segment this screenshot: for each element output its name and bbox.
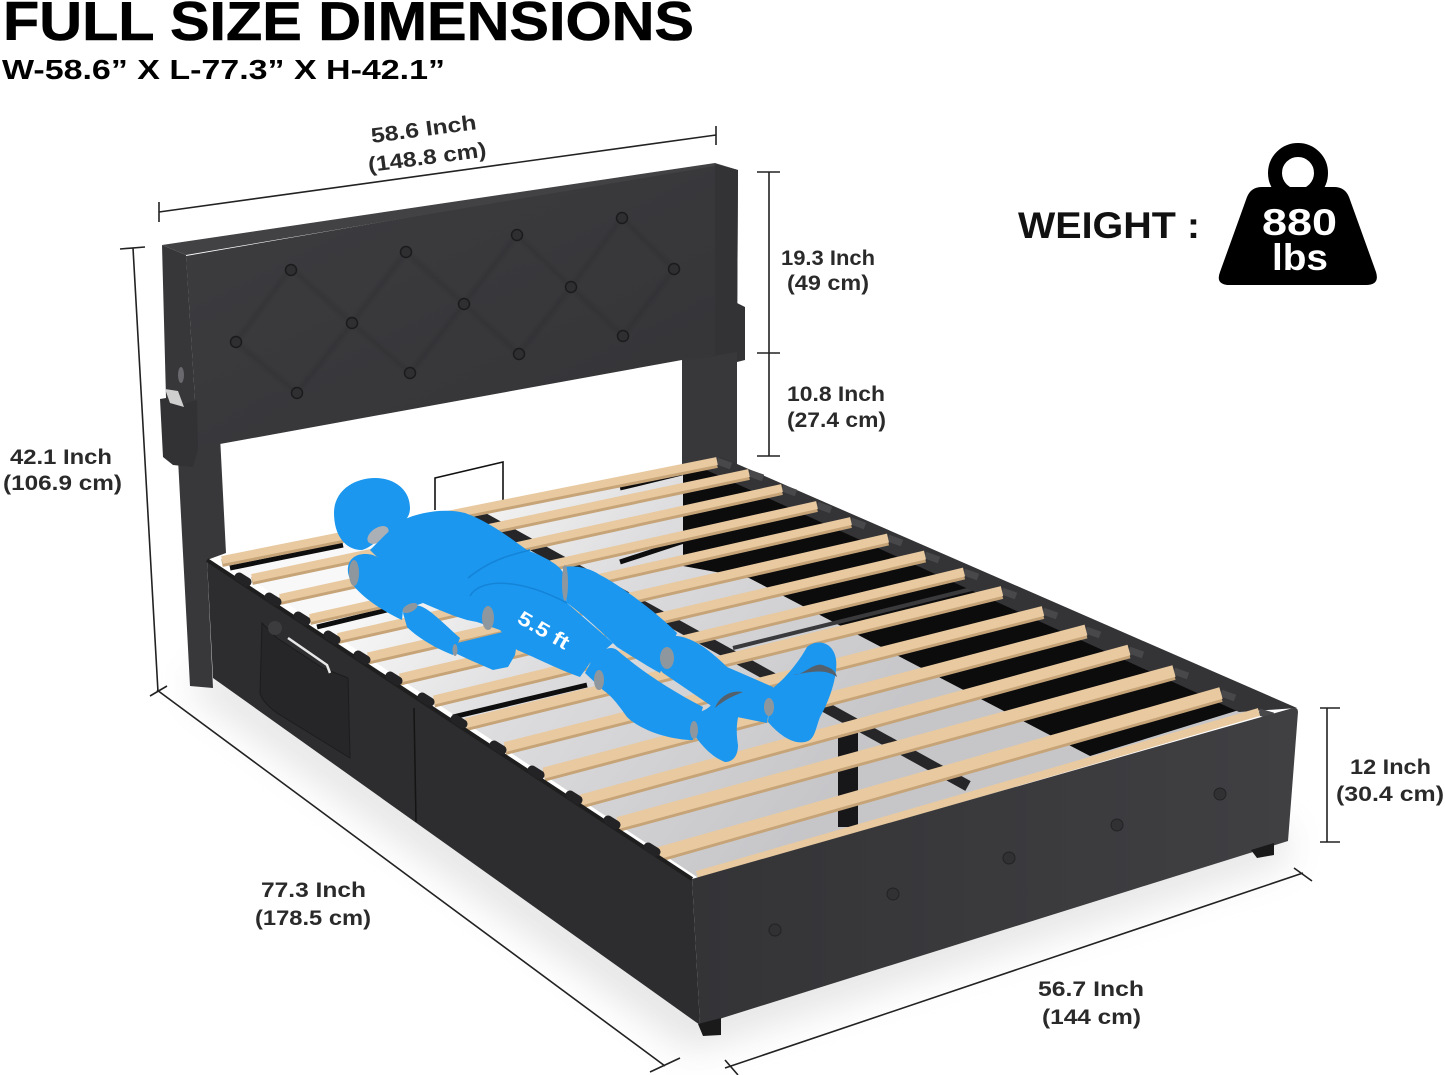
foot width metric: (144 cm) <box>1042 1006 1141 1029</box>
icon: weight <box>1219 150 1377 285</box>
left side rail <box>207 560 700 1025</box>
width label: 58.6 Inch <box>370 111 478 148</box>
rail studs <box>239 577 656 852</box>
foot rail buttons <box>769 788 1226 936</box>
black storage shadow <box>683 460 1252 756</box>
torso <box>370 511 613 677</box>
right side rail <box>704 457 1297 712</box>
device in pocket <box>288 638 330 673</box>
clearance height: 10.8 Inch <box>787 383 885 406</box>
floor under slats <box>222 462 1260 877</box>
figure height label: 5.5 ft <box>514 607 573 655</box>
far foot <box>1251 843 1274 858</box>
headboard panel height: 19.3 Inch <box>781 247 875 270</box>
center support beam <box>476 514 968 786</box>
width label metric: (148.8 cm) <box>367 139 488 177</box>
cross bars under slats <box>230 473 687 717</box>
cross bar in storage <box>733 582 1000 648</box>
left headboard pocket <box>160 398 198 467</box>
headboard <box>160 163 745 467</box>
weight callout <box>1018 150 1377 285</box>
bed feet <box>698 1018 721 1036</box>
near leg <box>585 648 743 762</box>
human figure <box>334 478 837 762</box>
wooden slats <box>222 461 1259 875</box>
side pocket <box>260 623 350 758</box>
dimension: headboard width <box>159 111 716 222</box>
right headboard pocket <box>737 303 745 362</box>
length metric: (178.5 cm) <box>255 907 371 930</box>
slat shadows <box>222 464 1221 856</box>
slat brackets <box>717 461 1273 716</box>
usb port <box>178 367 184 383</box>
right headboard leg <box>682 350 737 470</box>
pocket clip <box>268 621 282 635</box>
gray joints <box>349 560 774 739</box>
total height metric: (106.9 cm) <box>3 472 122 495</box>
dimension: rail height <box>1320 708 1444 842</box>
neck joint <box>364 522 392 548</box>
hip seam <box>468 550 567 603</box>
head <box>334 478 410 550</box>
phone in pocket <box>165 389 184 407</box>
drawer seam <box>414 708 416 822</box>
panel height metric: (49 cm) <box>787 272 869 295</box>
headboard left side <box>162 245 198 456</box>
dimension: total height <box>3 247 167 696</box>
foot rail <box>692 708 1298 1036</box>
near arm <box>348 554 517 670</box>
dimension: headboard heights <box>757 172 886 456</box>
length label: 77.3 Inch <box>261 879 366 902</box>
floor shadow under bed <box>190 660 1290 1050</box>
icon: weight: 880 <box>1262 202 1337 243</box>
tufted buttons <box>230 212 680 398</box>
rail height label: 12 Inch <box>1350 756 1431 779</box>
foot width label: 56.7 Inch <box>1038 978 1144 1001</box>
left headboard leg <box>177 436 226 688</box>
bed platform interior <box>222 460 1260 877</box>
tuft seams <box>236 218 674 393</box>
right wing <box>682 164 738 361</box>
clearance height metric: (27.4 cm) <box>787 409 886 432</box>
rail height metric: (30.4 cm) <box>1336 783 1444 806</box>
support leg <box>838 733 858 827</box>
icon: weight: lbs <box>1272 237 1328 278</box>
dimension: length <box>157 690 680 1072</box>
dimension: foot width <box>725 868 1312 1075</box>
headboard top edge <box>162 163 738 255</box>
total height label: 42.1 Inch <box>10 446 112 469</box>
subtitle: overall dimensions: W-58.6” X L-77.3” X H-42.1” <box>2 54 445 85</box>
far leg <box>563 566 836 742</box>
wire stand behind bed <box>435 462 503 510</box>
rail top trim <box>207 560 692 879</box>
weight label: WEIGHT : <box>1018 205 1200 246</box>
foot marks <box>715 665 837 708</box>
headboard face <box>186 164 738 448</box>
